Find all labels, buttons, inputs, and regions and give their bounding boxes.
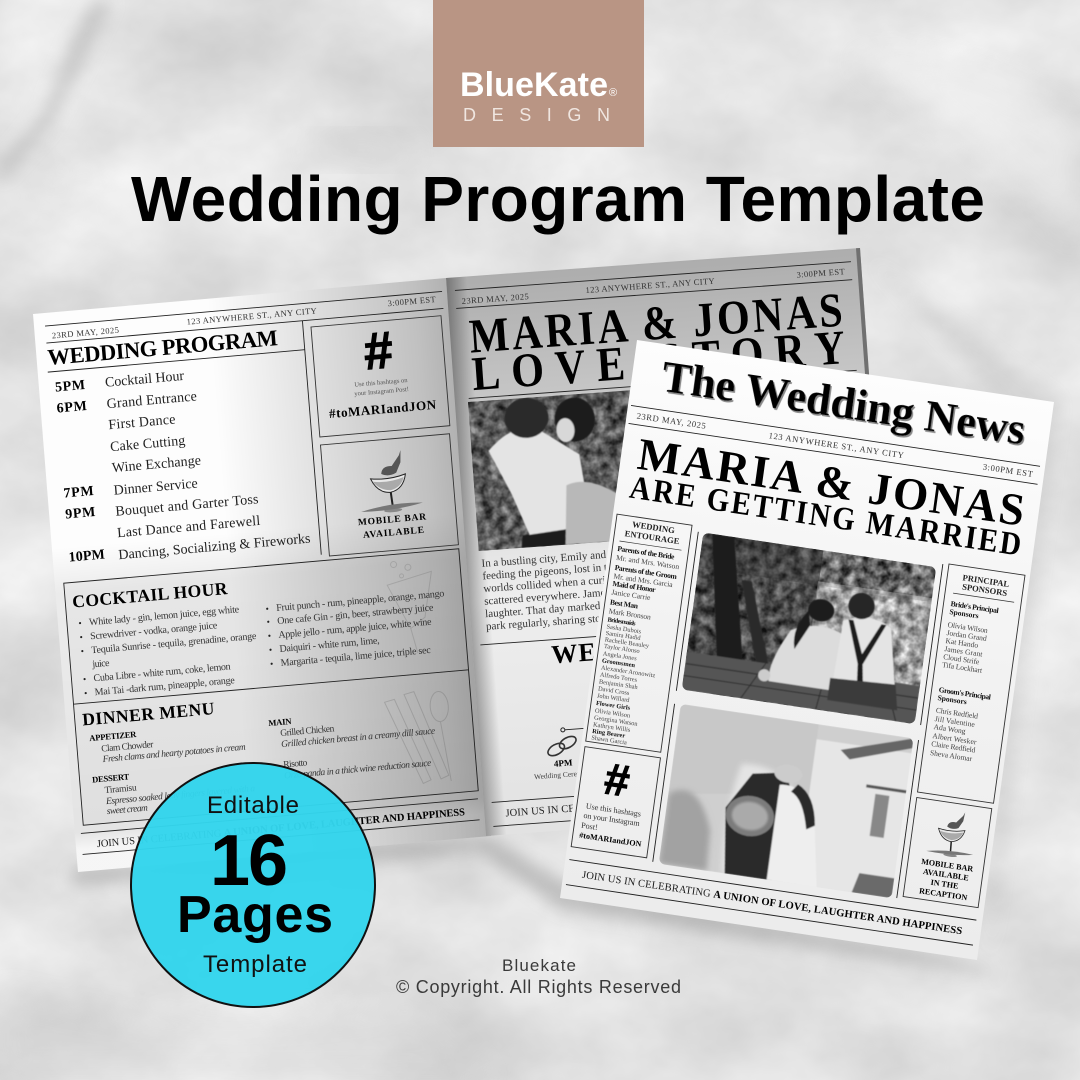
header strip: date, address, time — [45, 291, 443, 343]
header strip: 123 ANYWHERE ST., ANY CITY — [768, 430, 904, 460]
headline: Maria and Jonas love story — [462, 282, 857, 401]
hashtag box: #toMARIandJON — [579, 831, 642, 849]
panel: wedding entourage: Samira Hadid — [605, 630, 642, 642]
schedule list: Last Dance and Farewell — [116, 513, 261, 541]
panel: principal sponsors: Jordan Grand — [946, 628, 988, 643]
headline: Maria and Jonas love story: MARIA & JONAS — [467, 283, 844, 363]
schedule list: 6PM — [56, 398, 87, 417]
timeline: 4PM ceremony — [531, 709, 832, 781]
header strip — [455, 262, 852, 308]
icon: wedding rings — [545, 734, 579, 759]
header strip: 23RD MAY, 2025 — [461, 291, 529, 306]
cocktail list, right column: Margarita - tequila, lime juice, triple sec — [280, 645, 432, 669]
cocktail list, left column: Screwdriver - vodka, orange juice — [90, 620, 218, 642]
panel: principal sponsors: SPONSORS — [962, 581, 1008, 598]
panel: wedding entourage: Olivia Wilson — [595, 707, 631, 720]
masthead: The Wedding News: The Wedding News — [659, 351, 1029, 454]
panel: wedding entourage: Maid of Honor — [612, 579, 657, 594]
cocktail list, left column: juice — [91, 658, 110, 670]
schedule list: 10PM — [68, 547, 105, 566]
panel: principal sponsors: James Grant — [944, 644, 984, 659]
panel: wedding entourage: Parents of the Groom — [614, 563, 678, 581]
header strip: date, address, time: 23RD MAY, 2025 — [51, 325, 119, 341]
photo: bride and groom with bouquet — [659, 704, 914, 898]
panel: wedding entourage: Best Man — [609, 597, 639, 611]
panel: wedding entourage: Benjamin Shah — [599, 678, 639, 691]
panel: principal sponsors: Sponsors — [937, 693, 967, 706]
hashtag box: Use this hashtags on — [354, 377, 409, 389]
panel: wedding entourage: Janice Carrie — [611, 587, 652, 602]
panel: principal sponsors: Ada Wong — [933, 722, 966, 736]
cocktail list, right column: Daiquiri - white rum, lime, — [279, 635, 380, 655]
heading: dinner menu: DINNER MENU — [82, 698, 215, 730]
schedule list: Grand Entrance — [106, 388, 197, 412]
cocktail list, right column: One cafe Gin - gin, beer, strawberry juice — [277, 602, 434, 627]
column rules — [653, 528, 943, 898]
schedule list: Cake Cutting — [110, 433, 186, 455]
story text: park regularly, sharing stories and dreams together — [486, 605, 709, 633]
panel: wedding entourage: Shawn Garcia — [591, 734, 627, 747]
schedule list: 7PM — [63, 483, 94, 502]
panel: left open page, wedding program — [33, 278, 491, 872]
panel: wedding entourage: Alfredo Torres — [599, 671, 638, 684]
hashtag box: on your Instagram — [583, 811, 641, 828]
story text: In a bustling city, Emily and James met in a small park — [481, 540, 723, 570]
dinner menu, left column — [88, 719, 257, 818]
hashtag box: Use this hashtags — [585, 802, 642, 819]
hashtag box: #toMARIandJON — [328, 397, 437, 421]
panel: principal sponsors: Chris Redfield — [935, 706, 979, 721]
heading: wedding program: WEDDING PROGRAM — [47, 325, 279, 370]
watermark: cutlery drawing — [384, 689, 454, 786]
panel: front page, the wedding news — [560, 340, 1054, 960]
panel: principal sponsors: Olivia Wilson — [947, 620, 989, 635]
cocktail list, left column: White lady - gin, lemon juice, egg white — [89, 604, 240, 628]
dinner menu, left column: APPETIZER — [89, 729, 138, 743]
watermark: cocktail drawing — [385, 558, 438, 655]
hashtag box: # — [362, 321, 395, 382]
panel: wedding entourage: Georgina Watson — [594, 714, 639, 728]
dinner menu, left column: DESSERT — [92, 771, 130, 785]
cocktail list, left column: Tequila Sunrise - tequila, grenadine, orange — [91, 631, 257, 656]
headline: Maria and Jonas are getting married: MARIA & JONAS — [635, 428, 1028, 536]
panel: wedding entourage: Mr. and Mrs. Watson — [616, 553, 680, 571]
dinner menu, left column: Clam Chowder — [101, 740, 155, 755]
panel: principal sponsors: Claire Redfield — [931, 739, 976, 755]
footer strip: JOIN US IN CELEBRATING A UNION OF LOVE, LAUGHTER AND HAPPINESS — [581, 870, 963, 937]
shadow under pages — [70, 260, 1060, 975]
header strip: 23RD MAY, 2025 — [636, 411, 706, 431]
panel: wedding entourage: Angela Jones — [602, 650, 638, 662]
panel: wedding entourage: Parents of the Bride — [617, 544, 676, 561]
story text — [474, 530, 876, 645]
cocktail list, left column: Cuba Libre - white rum, coke, lemon — [93, 661, 231, 684]
badge: editable 16 pages template: 16 — [210, 821, 288, 901]
logo: BlueKate Design — [433, 0, 644, 147]
hashtag box: your Instagram Post! — [354, 386, 409, 398]
hashtag box: Post! — [581, 821, 598, 832]
copyright notice: © Copyright. All Rights Reserved — [396, 977, 681, 997]
icon: cocktail glass — [926, 807, 979, 860]
schedule list — [54, 358, 311, 568]
mobile bar box: AVAILABLE — [923, 867, 969, 883]
header strip: 3:00PM EST — [982, 462, 1034, 479]
cocktail list, left column: Mai Tai -dark rum, pineapple, orange — [94, 675, 236, 698]
panel: principal sponsors: Tifa Lockhart — [942, 660, 984, 675]
headline: Maria and Jonas love story: LOVE STORY — [470, 321, 847, 401]
badge: editable 16 pages template: Editable — [207, 792, 299, 819]
panel: wedding entourage: Taylor Alonso — [603, 643, 640, 655]
panel: principal sponsors: Kat Hando — [945, 636, 979, 650]
panel: principal sponsors: Cloud Strife — [943, 652, 981, 666]
footer strip — [492, 774, 889, 826]
logo: BlueKate Design: BlueKate — [460, 66, 608, 104]
mobile bar box: MOBILE BAR — [921, 857, 974, 874]
mobile bar box: RECAPTION — [919, 886, 968, 902]
panel: principal sponsors: Sheva Alomar — [929, 748, 973, 763]
header strip: date, address, time: 3:00PM EST — [387, 294, 437, 308]
panel: wedding entourage: Mark Bronson — [608, 606, 652, 622]
cocktail list, left column — [79, 603, 261, 699]
panel: wedding entourage: Ring Bearer — [592, 728, 626, 740]
dinner menu, left column: Tiramisu — [104, 783, 137, 796]
panel: wedding entourage: John Willard — [597, 692, 631, 704]
schedule list: 5PM — [54, 377, 86, 396]
panel: principal sponsors: Sponsors — [949, 607, 979, 620]
heading: wedding timeline: WEDDING TIMELINE — [550, 620, 837, 669]
photo: embracing couple — [468, 390, 630, 551]
story text: worlds collided when a curious bird knocked books — [483, 567, 711, 595]
dinner menu, right column: MAIN — [268, 716, 293, 728]
dinner menu, right column: Grilled Chicken — [280, 724, 335, 739]
heading: cocktail hour: COCKTAIL HOUR — [71, 578, 228, 612]
cocktail list, right column — [266, 588, 449, 670]
dinner menu, right column: Grilled chicken breast in a creamy dill sauce — [281, 727, 436, 750]
mobile bar box — [320, 434, 458, 556]
badge: editable 16 pages template: Template — [203, 951, 307, 978]
schedule list: First Dance — [108, 411, 176, 433]
schedule list: Cocktail Hour — [104, 368, 185, 391]
mobile bar box: MOBILE BAR — [358, 512, 427, 528]
panel: wedding entourage — [586, 514, 692, 752]
dinner menu, left column: Espresso soaked lady fingers layered with a — [105, 783, 256, 807]
schedule list: Dancing, Socializing & Fireworks — [118, 531, 311, 563]
panel: principal sponsors: Bride's Principal — [950, 599, 999, 615]
mobile bar box: IN THE — [930, 878, 959, 891]
panel: wedding entourage: WEDDING — [632, 519, 676, 535]
panel: wedding entourage: Alexander Aronowitz — [600, 664, 656, 679]
dinner menu, left column: Fresh clams and hearty potatoes in cream — [101, 743, 246, 765]
schedule list: Wine Exchange — [111, 453, 202, 476]
hashtag box — [311, 316, 450, 437]
schedule list: 9PM — [65, 504, 96, 523]
photo: couple seated in forest — [682, 533, 936, 724]
badge: editable 16 pages template — [131, 763, 375, 1007]
panel: wedding entourage: Rachelle Beauley — [604, 636, 650, 650]
panel: wedding entourage: Kathryn Willis — [593, 721, 631, 734]
footer strip: JOIN US IN CELEBRATING A UNION OF LOVE, LAUGHTER AND HAPPINESS — [505, 782, 874, 819]
dinner menu, right column: Risotto — [283, 758, 308, 770]
timeline: 4PM ceremony: 4PM — [554, 757, 573, 769]
panel: wedding entourage: Flower Girls — [596, 700, 631, 712]
badge: editable 16 pages template: Pages — [177, 886, 333, 944]
mobile bar box: AVAILABLE — [363, 526, 424, 541]
cocktail list, right column: Fruit punch - rum, pineapple, orange, mango — [276, 588, 445, 614]
panel: wedding entourage: Sasha Dubois — [606, 623, 642, 636]
footer strip: JOIN US IN CELEBRATING A UNION OF LOVE, LAUGHTER AND HAPPINESS — [96, 807, 466, 850]
panel: wedding entourage: Bridesmaids — [607, 616, 637, 628]
cocktail list, right column: Apple jello - rum, apple juice, white wine — [278, 617, 432, 641]
header strip — [629, 405, 1040, 484]
panel: cocktail hour and dinner menu — [64, 549, 478, 825]
headline: Maria and Jonas are getting married: ARE GETTING MARRIED — [628, 468, 1024, 563]
panel: wedding entourage: ENTOURAGE — [624, 528, 680, 546]
logo: BlueKate Design: DESIGN — [463, 105, 610, 125]
panel: principal sponsors: Jill Valentine — [934, 714, 976, 729]
dinner menu, right column — [268, 704, 439, 782]
panel: wedding entourage: Mr. and Mrs. Garcia — [613, 571, 674, 589]
story text: scattered everywhere. James rushed to help with — [484, 580, 698, 608]
dinner menu, left column: sweet cream — [106, 804, 148, 817]
timeline: 4PM ceremony: Wedding Ceremony — [534, 768, 595, 781]
copyright notice — [396, 956, 681, 997]
panel: wedding entourage: David Cross — [598, 685, 630, 697]
story text: laughter. That day marked the start of it all, at the — [485, 593, 703, 620]
dinner menu, right column: Orzo panda in a thick wine reduction sauce — [284, 759, 432, 781]
panel: wedding entourage: Groomsmen — [601, 657, 636, 669]
panel: principal sponsors: Groom's Principal — [938, 685, 991, 702]
header strip: 3:00PM EST — [796, 266, 846, 280]
logo: BlueKate Design: ® — [609, 87, 617, 99]
schedule list: Bouquet and Garter Toss — [115, 491, 259, 520]
panel: principal sponsors — [918, 564, 1025, 803]
header strip: 123 ANYWHERE ST., ANY CITY — [585, 276, 715, 295]
panel: principal sponsors: PRINCIPAL — [962, 572, 1010, 589]
icon: cocktail glass — [356, 449, 423, 515]
panel: principal sponsors: Albert Wesker — [932, 731, 978, 747]
hashtag box: # — [601, 755, 633, 807]
title: Wedding Program Template — [131, 163, 985, 235]
story text: feeding the pigeons, lost in their own thoughts. Their — [482, 554, 716, 583]
schedule list: Dinner Service — [113, 475, 198, 499]
hashtag box — [571, 747, 660, 858]
copyright notice: Bluekate — [502, 956, 576, 975]
mobile bar box — [903, 797, 992, 908]
panel: right open page, love story — [446, 248, 900, 836]
header strip: date, address, time: 123 ANYWHERE ST., ANY CITY — [186, 305, 317, 327]
